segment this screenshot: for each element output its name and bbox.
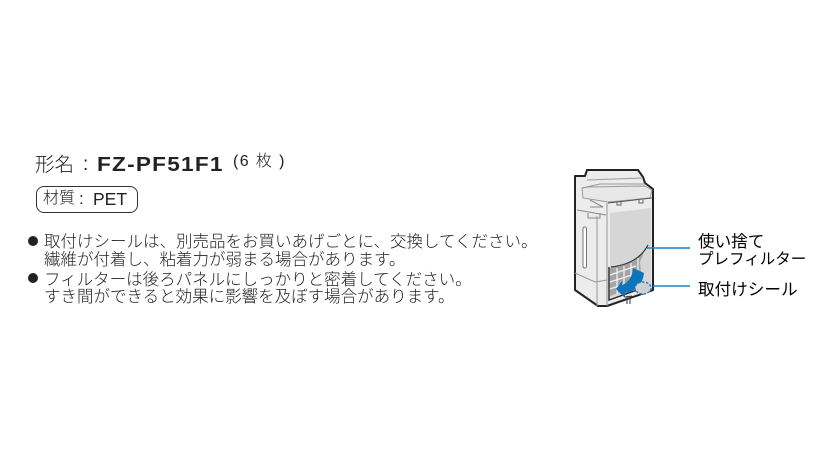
model number: FZ-PF51F1 bbox=[97, 154, 224, 176]
label: disposable pre-filter bbox=[698, 232, 806, 268]
quantity: (6 枚 ) bbox=[233, 153, 286, 170]
label: disposable pre-filter: 使い捨て bbox=[698, 232, 764, 251]
note 1: 取付けシールは、別売品をお買いあげごとに、交換してください。 bbox=[44, 233, 538, 251]
note 2 bbox=[44, 271, 472, 306]
note list bbox=[28, 233, 538, 306]
colon: : bbox=[83, 154, 88, 175]
foot detail bbox=[625, 296, 632, 304]
pre-filter panel bbox=[610, 208, 651, 298]
intake grille bbox=[609, 252, 651, 300]
leader line: seal bbox=[653, 285, 690, 287]
bullet 2 bbox=[28, 273, 38, 283]
seal marker: dashed circle bbox=[635, 282, 651, 294]
note 1: 繊維が付着し、粘着力が弱まる場合があります。 bbox=[44, 251, 405, 269]
material badge bbox=[36, 186, 138, 213]
material colon: : bbox=[79, 189, 84, 208]
purifier body bbox=[575, 170, 653, 306]
icon: blue arrow showing removal direction bbox=[616, 268, 644, 298]
label: disposable pre-filter: プレフィルター bbox=[698, 251, 806, 268]
filter edge curve bbox=[611, 245, 648, 267]
label: model name: 形名 bbox=[35, 154, 74, 176]
material text: 材質 bbox=[43, 190, 75, 207]
note 1 bbox=[44, 233, 538, 269]
leader line: pre-filter bbox=[647, 247, 690, 249]
label: attachment seal: 取付けシール bbox=[698, 280, 798, 299]
bullet 1 bbox=[28, 236, 38, 246]
heading: model name bbox=[35, 152, 286, 176]
note 2: フィルターは後ろパネルにしっかりと密着してください。 bbox=[44, 271, 472, 289]
note 2: すき間ができると効果に影響を及ぼす場合があります。 bbox=[44, 288, 455, 306]
material value: PET bbox=[93, 189, 127, 209]
